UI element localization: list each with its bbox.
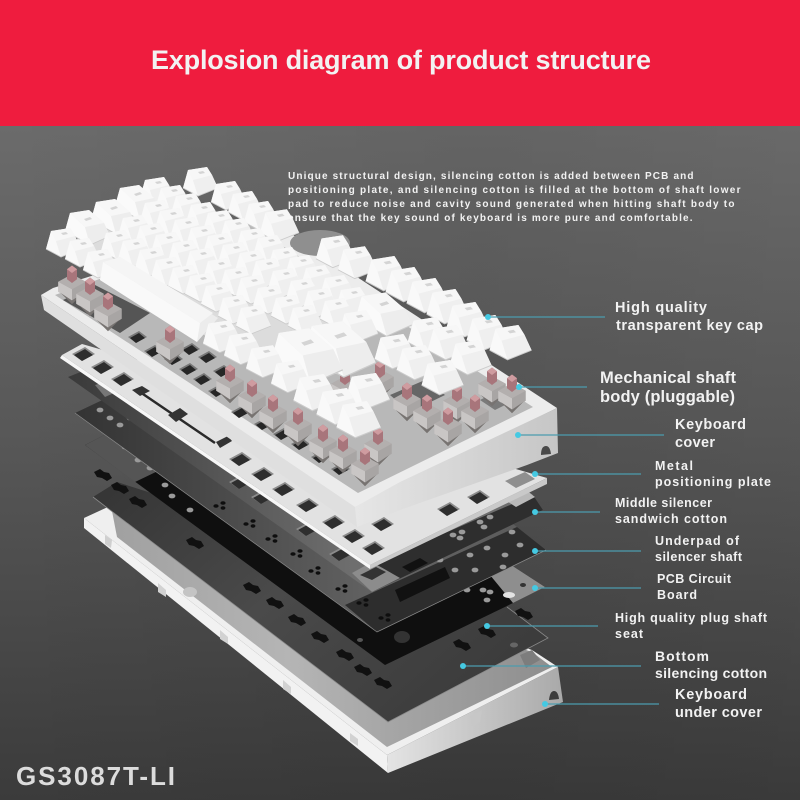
underpad of silencer shaft — [75, 330, 546, 632]
label: high quality transparent key cap: High quality — [615, 300, 707, 316]
label: metal positioning plate: positioning plate — [655, 475, 771, 489]
metal positioning plate — [60, 344, 547, 569]
label: high quality plug shaft seat: High quality plug shaft — [615, 611, 768, 625]
label: mechanical shaft body: body (pluggable) — [600, 388, 735, 406]
label: middle silencer sandwich cotton: sandwich cotton — [615, 512, 727, 526]
label: metal positioning plate — [532, 459, 771, 489]
bottom silencing cotton — [93, 482, 548, 722]
label: metal positioning plate: Metal — [655, 459, 693, 473]
middle silencer sandwich cotton — [68, 305, 543, 592]
label: bottom silencing cotton — [460, 648, 767, 681]
label: bottom silencing cotton: Bottom — [655, 648, 709, 664]
label: keyboard under cover: under cover — [675, 705, 762, 721]
label: high quality transparent key cap — [485, 300, 763, 334]
description paragraph: Unique structural design, silencing cotton is added between PCB and — [288, 171, 694, 182]
label: PCB circuit board: PCB Circuit — [657, 572, 732, 586]
description paragraph: pad to reduce noise and cavity sound generated when hitting shaft body to — [288, 199, 735, 210]
label: keyboard under cover: Keyboard — [675, 687, 747, 703]
label: keyboard cover: Keyboard — [675, 417, 746, 433]
label: mechanical shaft body — [516, 369, 736, 406]
soft blur patch behind keys — [290, 230, 350, 256]
keyboard under cover — [84, 506, 563, 773]
PCB circuit board — [85, 360, 545, 665]
keyboard cover — [41, 220, 558, 527]
label: high quality transparent key cap: transparent key cap — [616, 318, 763, 334]
label: mechanical shaft body: Mechanical shaft — [600, 369, 736, 387]
label: keyboard cover: cover — [675, 435, 715, 451]
label: keyboard cover — [515, 417, 746, 451]
red title banner — [0, 0, 800, 126]
mechanical switches — [58, 266, 526, 486]
label: underpad of silencer shaft: Underpad of — [655, 534, 740, 548]
transparent key caps — [46, 167, 532, 438]
label: PCB circuit board: Board — [657, 588, 697, 602]
label: high quality plug shaft seat — [484, 611, 768, 641]
label: middle silencer sandwich cotton: Middle silencer — [615, 496, 712, 510]
title: Explosion diagram of product structure — [151, 45, 651, 75]
label: high quality plug shaft seat: seat — [615, 627, 644, 641]
exploded keyboard diagram — [41, 167, 563, 773]
description paragraph: positioning plate, and silencing cotton is filled at the bottom of shaft lower — [288, 185, 741, 196]
label: underpad of silencer shaft: silencer shaft — [655, 550, 743, 564]
plug shaft seat sockets — [94, 469, 533, 689]
description paragraph — [288, 171, 741, 224]
description paragraph: ensure that the key sound of keyboard is more pure and comfortable. — [288, 213, 693, 224]
model number: GS3087T-LI — [16, 761, 175, 791]
label: PCB circuit board — [532, 572, 732, 602]
label: bottom silencing cotton: silencing cotton — [655, 665, 767, 681]
label: keyboard under cover — [542, 687, 762, 721]
label: underpad of silencer shaft — [532, 534, 743, 564]
label: middle silencer sandwich cotton — [532, 496, 727, 526]
